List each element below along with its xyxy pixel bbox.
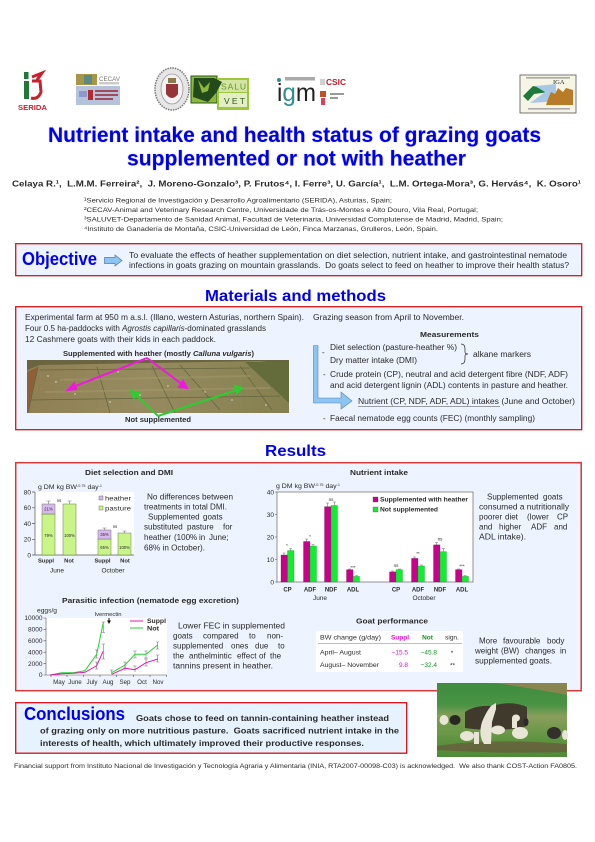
logo: IGA: IGA: [553, 79, 565, 86]
chart: diet selection and DMI: 100%: [64, 533, 75, 538]
chart axis labels: [38, 558, 130, 564]
text: FEC findings: due: [255, 642, 269, 650]
chart: diet selection and DMI: 0: [27, 552, 31, 560]
table: goat performance: *: [451, 650, 454, 657]
text: nutrient findings: (lower: [527, 512, 549, 522]
chart: diet selection and DMI: June: [50, 568, 64, 574]
arrow: nutrient derivation: [314, 346, 352, 409]
measurements list: -: [323, 370, 326, 379]
text: DMI findings: 68% in October).: [144, 544, 205, 552]
photo label: supplemented: Supplemented with heather (mostly Calluna vulgaris ): [63, 351, 254, 358]
table: goat performance: **: [450, 662, 455, 670]
title: [48, 123, 541, 170]
text: performance findings: favourable: [503, 636, 541, 646]
arrows: not supplemented paddocks: [131, 386, 242, 416]
text: FEC findings: the: [173, 652, 185, 660]
chart: parasitic infection: May: [53, 679, 66, 686]
chart title: Diet selection and DMI: [85, 468, 173, 477]
text: performance findings: [474, 636, 566, 666]
text: nutrient findings: higher: [499, 522, 522, 532]
text: DMI findings: June;: [209, 533, 229, 542]
chart axis labels: CP: [392, 588, 400, 594]
text: performance findings: in: [560, 646, 566, 656]
chart: nutrient intake: ***: [350, 565, 356, 570]
experiment description: 12 Cashmere goats with their kids in each paddock.: [25, 335, 216, 344]
text: DMI findings: in: [199, 533, 205, 542]
photo: goats feeding on heather: [437, 683, 568, 757]
title: supplemented or not with heather: [127, 146, 467, 170]
text: FEC findings: anthelmintic: [189, 652, 232, 660]
affiliations: ³SALUVET-Departamento de Sanidad Animal, Facultad de Veterinaria, Universidad Complutense de Madrid, Madrid, Spain;: [84, 216, 503, 223]
conclusions text: interests of health, which ultimately improved their productive responses.: [40, 739, 364, 748]
text: DMI findings: [144, 492, 233, 552]
text: DMI findings: No differences between: [147, 492, 233, 502]
text: nutrient findings: and: [554, 522, 567, 532]
chart: nutrient intake: 20: [267, 534, 274, 542]
text: FEC findings: supplemented: [173, 642, 223, 650]
measurements list: -: [323, 414, 326, 423]
chart: diet selection and DMI: [24, 468, 173, 574]
chart: diet selection and DMI: October: [101, 568, 125, 574]
chart: diet selection and DMI: -1: [99, 484, 102, 488]
table: goat performance: April– August: [320, 650, 361, 656]
affiliations: [84, 197, 503, 233]
chart legend: Not supplemented: [380, 506, 438, 514]
panel: objective: [16, 244, 582, 276]
measurements list: Dry matter intake (DMI): [330, 356, 417, 365]
photo label: not supplemented: Not supplemented: [125, 417, 191, 424]
chart legend: heather: [105, 496, 132, 502]
logo: igm: igm: [277, 79, 316, 107]
panel: materials and methods: [16, 307, 582, 430]
chart: nutrient intake: 0: [270, 580, 274, 586]
chart: parasitic infection: 10000: [24, 615, 43, 622]
table: goat performance: BW change (g/day): [320, 634, 381, 642]
text: performance findings: (BW): [501, 646, 520, 656]
text: DMI findings: (100%: [174, 533, 197, 542]
chart axis labels: [283, 588, 468, 594]
text: FEC findings: to: [249, 632, 256, 640]
chart axis labels: NDF: [325, 588, 337, 594]
chart legend: Suppl: [147, 618, 166, 625]
text: DMI findings: pasture: [187, 522, 214, 532]
table: goat performance: −45.8: [421, 650, 437, 656]
annotation: ivermectin: [94, 612, 122, 624]
text: nutrient findings: goats: [543, 492, 563, 502]
logo: SERIDA: SERIDA: [18, 105, 47, 112]
measurements list: [322, 343, 575, 423]
text: nutrient findings: and: [479, 522, 492, 532]
chart axis labels: ADF: [304, 588, 316, 594]
chart: parasitic infection: July: [86, 679, 98, 686]
chart legend: [99, 496, 132, 512]
conclusions text: of grazing only on more nutritious pasture. Goats sacrificed nutrient intake in the: [40, 726, 400, 736]
text: performance findings: More: [479, 636, 498, 646]
text: DMI findings: heather: [144, 533, 171, 542]
chart: parasitic infection: 0: [39, 672, 43, 679]
chart: parasitic infection: 8000: [28, 627, 43, 634]
affiliations: ¹Servicio Regional de Investigación y Desarrollo Agroalimentario (SERIDA), Asturias, Spain;: [84, 197, 392, 204]
text: DMI findings: for: [223, 522, 233, 532]
text: FEC findings: tannins present in heather.: [173, 662, 273, 670]
logo: university seal: [155, 68, 189, 110]
chart: parasitic infection: 4000: [28, 649, 43, 656]
chart: nutrient intake: -0.75: [315, 483, 324, 487]
text: performance findings: body: [547, 636, 564, 646]
heading: conclusions: Conclusions: [24, 704, 125, 724]
annotation: ivermectin: Ivermectin: [94, 612, 122, 618]
chart: diet selection and DMI: ns: [57, 498, 61, 503]
line: not supplemented: [50, 623, 158, 675]
table: goat performance: 9.8: [399, 662, 408, 669]
arrows: supplemented paddocks: [68, 358, 187, 390]
chart axis labels: ADL: [456, 588, 468, 594]
text: FEC findings: Lower FEC in supplemented: [178, 622, 285, 630]
text: FEC findings: goats: [173, 632, 193, 640]
heading: goat performance: Goat performance: [356, 616, 428, 626]
chart legend: pasture: [105, 506, 131, 512]
conclusions text: Goats chose to feed on tannin-containing heather instead: [136, 714, 389, 723]
chart legend: [373, 496, 469, 514]
logo: CSIC and Universidad de Leon: [320, 78, 346, 105]
authors: Celaya R.¹, L.M.M. Ferreira², J. Moreno-Gonzalo³, P. Frutos⁴, I. Ferre³, U. García¹, L.M. Ortega-Mora³, G. Hervás⁴, K. Osoro¹: [12, 178, 581, 188]
affiliations: ⁴Instituto de Ganadería de Montaña, CSIC-Universidad de León, Finca Marzanas, Grulleros, León, Spain.: [84, 226, 438, 233]
line: supplemented: [50, 651, 158, 675]
chart: nutrient intake: g DM kg BW: [276, 483, 312, 490]
text: nutrient findings: diet: [505, 512, 519, 522]
measurements heading: Measurements: [420, 330, 479, 339]
heather heap: [465, 703, 527, 730]
text: nutrient findings: Supplemented: [487, 492, 539, 502]
chart: parasitic infection: eggs/g: [37, 608, 57, 614]
experiment description: Four 0.5 ha-paddocks with Agrostis capillaris-dominated grasslands: [25, 324, 266, 333]
logo: SALUVET: VET: [224, 96, 245, 106]
chart: nutrient intake: June: [313, 595, 327, 602]
chart: parasitic infection: 2000: [28, 661, 43, 668]
text: FEC findings: effect: [237, 652, 257, 660]
table: goat performance: Suppl: [391, 634, 409, 642]
text: performance findings: changes: [525, 646, 555, 656]
chart: nutrient intake: [267, 468, 473, 602]
text: FEC findings: ones: [231, 642, 248, 650]
text: FEC findings: non-: [267, 632, 283, 640]
text: performance findings: weight: [474, 646, 499, 656]
text: nutrient findings: CP: [557, 512, 568, 522]
chart: diet selection and DMI: 79%: [44, 533, 53, 538]
heading: materials and methods: Materials and methods: [205, 288, 386, 305]
chart: diet selection and DMI: 80: [24, 490, 31, 496]
chart: diet selection and DMI: g DM kg BW: [38, 484, 74, 491]
measurements list: -: [322, 348, 325, 357]
measurements list: Crude protein (CP), neutral and acid detergent fibre (NDF, ADF): [330, 370, 568, 379]
chart: diet selection and DMI: 40: [24, 521, 31, 528]
title: Nutrient intake and health status of grazing goats: [48, 123, 541, 147]
experiment description: [25, 313, 464, 344]
logo: SALUVET: SALU: [221, 82, 246, 92]
conclusions text: [40, 714, 400, 748]
logos row: [18, 68, 576, 113]
chart: diet selection and DMI: 20: [24, 536, 31, 544]
panel: results: [16, 463, 581, 691]
chart: parasitic infection: June: [68, 679, 82, 686]
photo: paddocks: [27, 360, 289, 413]
chart: nutrient intake: **: [416, 551, 420, 556]
chart: parasitic infection: 6000: [28, 638, 43, 645]
chart axis labels: Suppl: [38, 558, 54, 564]
affiliations: ²CECAV-Animal and Veterinary Research Centre, Universidade de Trás-os-Montes e Alto Douro, Vila Real, Portugal;: [84, 207, 478, 214]
table: goat performance: −15.5: [392, 650, 408, 656]
chart: nutrient intake: *: [309, 534, 311, 539]
acknowledgement: Financial support from Instituto Nacional de Investigación y Tecnología Agraria y Alimentaria (INIA, RTA2007-00098-C03) is acknowledged. We also thank COST-Action FA0805.: [14, 763, 577, 770]
chart legend: [130, 618, 166, 632]
objective text: [129, 251, 570, 270]
chart: parasitic infection: Aug: [102, 679, 114, 686]
text: FEC findings: to: [278, 642, 285, 650]
measurements list: Faecal nematode egg counts (FEC) (monthly sampling): [330, 414, 535, 423]
chart: parasitic infection: Oct: [137, 679, 147, 686]
objective text: To evaluate the effects of heather supplementation on diet selection, nutrient intake, and gastrointestinal nematode: [129, 251, 568, 260]
chart: nutrient intake: ns: [394, 563, 399, 568]
chart axis labels: ADF: [412, 588, 424, 594]
text: FEC findings: [173, 622, 285, 670]
chart: diet selection and DMI: 21%: [44, 506, 53, 512]
chart axis labels: Not: [120, 558, 130, 564]
table: goat performance: −32.4: [421, 662, 437, 669]
chart: diet selection and DMI: 65%: [100, 545, 109, 550]
text: nutrient findings: poorer: [479, 512, 502, 522]
text: nutrient findings: consumed a nutritionally: [479, 502, 569, 512]
measurements list: alkane markers: [473, 350, 531, 359]
arrow: objective: [104, 255, 122, 266]
text: DMI findings: Supplemented: [148, 512, 200, 522]
measurements list: and acid detergent lignin (ADL) contents in pasture and heather.: [330, 381, 568, 390]
text: nutrient findings: ADF: [531, 522, 547, 532]
chart: nutrient intake: day: [324, 483, 337, 490]
chart: parasitic infection: [24, 596, 240, 686]
text: FEC findings: of: [259, 652, 266, 660]
experiment description: Experimental farm at 950 m a.s.l. (Illano, western Asturias, northern Spain).: [25, 313, 304, 322]
chart axis labels: ADL: [347, 588, 359, 594]
text: DMI findings: substituted: [144, 522, 183, 532]
bars: not supplemented: [288, 506, 468, 582]
text: nutrient findings: [479, 492, 569, 542]
stacked bars: [42, 504, 131, 555]
chart: nutrient intake: 40: [267, 490, 274, 496]
chart: parasitic infection: Sep: [119, 679, 131, 686]
chart legend: Not: [147, 626, 160, 632]
chart: nutrient intake: ns: [438, 536, 443, 542]
text: FEC findings: compared: [203, 632, 239, 640]
logo: SALUVET: [191, 76, 249, 110]
text: nutrient findings: ADL intake).: [479, 532, 526, 542]
goats: [440, 703, 568, 744]
text: DMI findings: treatments in total DMI.: [144, 502, 227, 512]
logo: IGA: [520, 75, 576, 113]
experiment description: Grazing season from April to November.: [313, 313, 464, 322]
chart: diet selection and DMI: 35%: [100, 532, 109, 537]
chart: diet selection and DMI: ns: [113, 524, 117, 529]
text: FEC findings: the: [270, 652, 282, 660]
chart: nutrient intake: 10: [267, 557, 274, 564]
table: goat performance: August– November: [320, 662, 380, 669]
chart title: Parasitic infection (nematode egg excretion): [62, 596, 240, 605]
chart axis labels: CP: [283, 588, 292, 594]
chart: nutrient intake: -1: [337, 483, 340, 487]
chart axis labels: Suppl: [94, 558, 111, 564]
chart: nutrient intake: 30: [267, 512, 274, 519]
chart title: Nutrient intake: [350, 468, 408, 477]
chart axis labels: Not: [64, 558, 74, 564]
logo: SERIDA: [18, 72, 47, 112]
chart: diet selection and DMI: day: [86, 484, 99, 491]
table: goat performance: sign.: [445, 634, 459, 642]
text: performance findings: supplemented goats.: [475, 656, 552, 666]
logo: CECAV: CECAV: [99, 76, 121, 83]
panel: conclusions: [16, 703, 407, 753]
chart: nutrient intake: *: [286, 543, 288, 548]
heading: results: Results: [265, 443, 326, 460]
logo: CECAV: [76, 74, 121, 105]
objective text: infections in goats grazing on mountain grasslands. Do goats select to feed on heather to improve their health status?: [129, 261, 570, 270]
text: DMI findings: goats: [203, 512, 223, 522]
bars: supplemented with heather: [281, 507, 462, 582]
chart: diet selection and DMI: -0.75: [77, 484, 86, 488]
heading: objective: Objective: [22, 249, 97, 269]
chart: diet selection and DMI: 100%: [119, 545, 130, 550]
chart: parasitic infection: Nov: [152, 679, 164, 686]
measurements list: Nutrient (CP, NDF, ADF, ADL) intakes (June and October): [358, 397, 575, 406]
measurements list: Diet selection (pasture-heather %): [330, 343, 457, 352]
chart: nutrient intake: ***: [459, 564, 465, 568]
table: goat performance: Not: [422, 634, 434, 642]
chart: diet selection and DMI: 60: [24, 505, 31, 512]
logo: CSIC and Universidad de Leon: CSIC: [326, 78, 346, 87]
table: goat performance: [316, 631, 463, 672]
chart legend: Supplemented with heather: [380, 496, 469, 504]
chart: nutrient intake: October: [412, 595, 436, 602]
chart: nutrient intake: ns: [329, 497, 334, 502]
chart axis labels: NDF: [434, 588, 446, 594]
